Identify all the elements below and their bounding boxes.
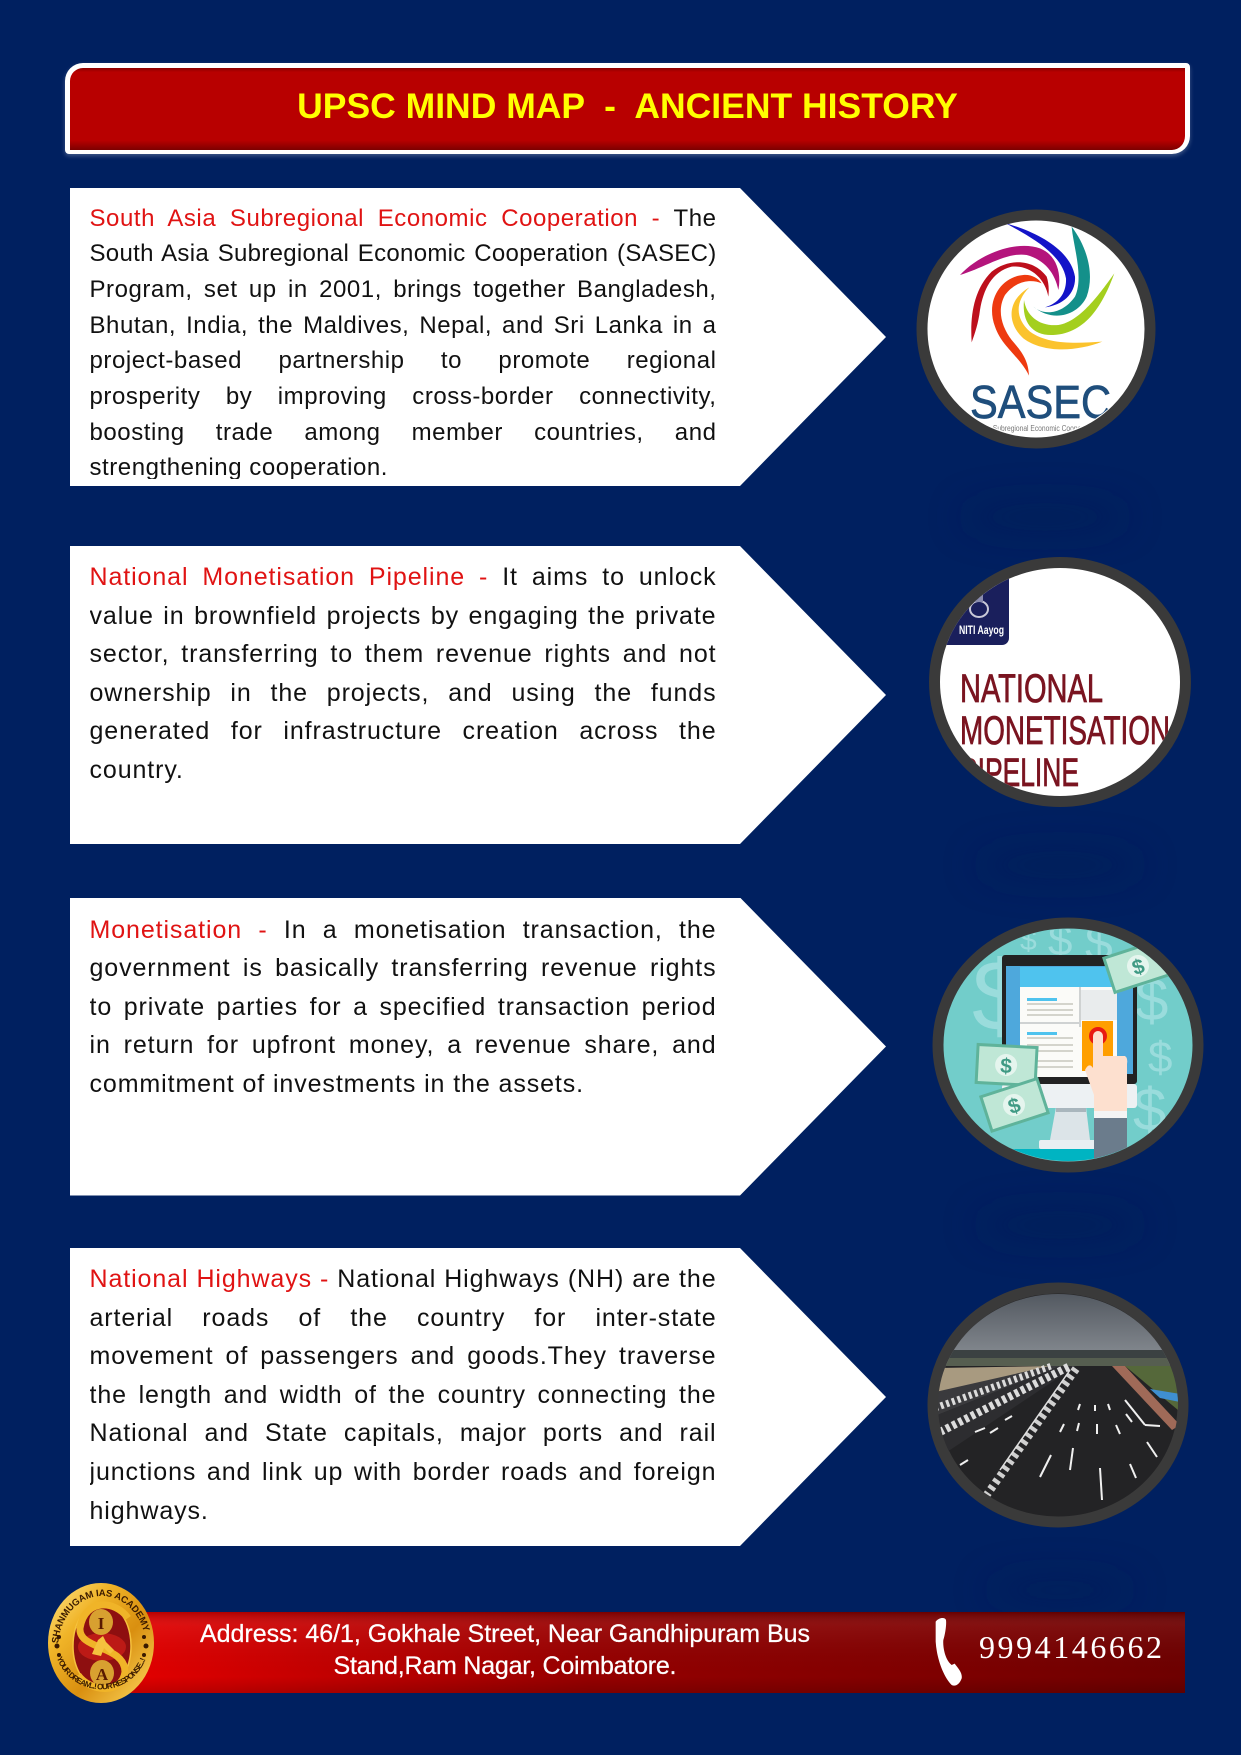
text: monetisation description: Monetisation - In a monetisation transaction, the [90,916,716,944]
icon: monetisation illustration circle: $ [1000,1055,1013,1078]
text: highways description: highways. [90,1497,209,1525]
icon: SASEC logo circle [922,215,1150,443]
icon: academy logo [48,1583,154,1703]
icon: monetisation illustration circle: $ [1085,915,1113,971]
text: pipeline description: ownership in the projects, and using the funds [90,679,716,707]
text: pipeline description: country. [90,756,184,784]
text: monetisation description: government is basically transferring revenue rights [90,954,716,982]
icon: monetisation illustration circle: $ [1148,1033,1172,1082]
text: SASEC description: Program, set up in 2001, brings together Bangladesh, [90,276,716,303]
text: pipeline description: sector, transferring to them revenue rights and not [90,640,716,668]
icon: monetisation illustration circle [925,915,1215,1179]
text: SASEC description: South Asia Subregional Economic Cooperation - The [90,204,716,232]
text: pipeline description: value in brownfield projects by engaging the private [90,602,716,630]
panel: South Asia Subregional Economic Cooperation [70,188,886,486]
footer address [200,1620,810,1680]
panel: Monetisation [70,898,886,1196]
icon: academy logo: A [96,1665,109,1684]
footer address: Stand,Ram Nagar, Coimbatore. [334,1652,676,1680]
icon: SASEC logo circle: Asia Subregional Economic Cooperation [978,424,1098,433]
text: highways description: junctions and link up with border roads and foreign [90,1458,716,1486]
icon: monetisation illustration circle: $ [972,940,1028,1052]
icon: monetisation illustration circle: $ [1020,924,1037,957]
icon: monetisation illustration circle: $ [1005,1094,1024,1119]
icon: National Monetisation Pipeline circle: NATIONAL [960,667,1103,711]
icon: monetisation illustration circle: $ [1133,1076,1166,1143]
text: pipeline description: National Monetisation Pipeline - It aims to unlock [90,563,716,591]
text: highways description: National and State capitals, major ports and rail [90,1419,716,1447]
icon: National Monetisation Pipeline circle: PIPELINE [960,751,1079,795]
text: highways description: arterial roads of the country for inter-state [90,1304,716,1332]
icon: monetisation illustration circle: $ [1048,916,1072,965]
SASEC wordmark: SASEC [970,376,1111,428]
text: highways description: the length and width of the country connecting the [90,1381,716,1409]
text: monetisation description: in return for upfront money, a revenue share, and [90,1031,716,1059]
icon: academy logo: I [98,1614,105,1633]
icon: telephone [936,1618,962,1686]
text: highways description: National Highways - National Highways (NH) are the [90,1265,716,1293]
icon: monetisation illustration circle: $ [1135,966,1168,1033]
text: monetisation description [90,916,716,1098]
icon: National Monetisation Pipeline circle [930,560,1186,802]
text: SASEC description: Bhutan, India, the Maldives, Nepal, and Sri Lanka in a [90,312,716,339]
text: monetisation description: commitment of investments in the assets. [90,1070,584,1098]
footer bar [100,1612,1185,1693]
text: highways description: movement of passengers and goods.They traverse [90,1342,716,1370]
text: SASEC description [90,204,716,479]
text: SASEC description: South Asia Subregional Economic Cooperation (SASEC) [90,240,716,267]
footer address: Address: 46/1, Gokhale Street, Near Gandhipuram Bus [200,1620,810,1648]
text: pipeline description: generated for infrastructure creation across the [90,717,716,745]
text: pipeline description [90,563,716,784]
text: SASEC description: boosting trade among member countries, and [90,419,716,446]
title text: UPSC MIND MAP - ANCIENT HISTORY [297,86,958,126]
panel: National Highways [70,1248,886,1546]
icon: academy logo: SHANMUGAM IAS ACADEMY [52,1590,150,1643]
text: SASEC description: project-based partnership to promote regional [90,347,716,374]
text: highways description [90,1265,716,1525]
footer phone number: 9994146662 [979,1629,1162,1665]
panel: National Monetisation Pipeline [70,546,886,844]
text: monetisation description: to private parties for a specified transaction period [90,993,716,1021]
icon: academy logo: YOUR DREAM...! OUR RESPONSE...! [58,1656,146,1690]
text: SASEC description: prosperity by improving cross-border connectivity, [90,383,716,410]
title banner [65,63,1190,154]
icon: highway photo circle [930,1288,1190,1522]
icon: National Monetisation Pipeline circle: NITI Aayog [959,623,1004,637]
icon: monetisation illustration circle: $ [1129,955,1148,980]
